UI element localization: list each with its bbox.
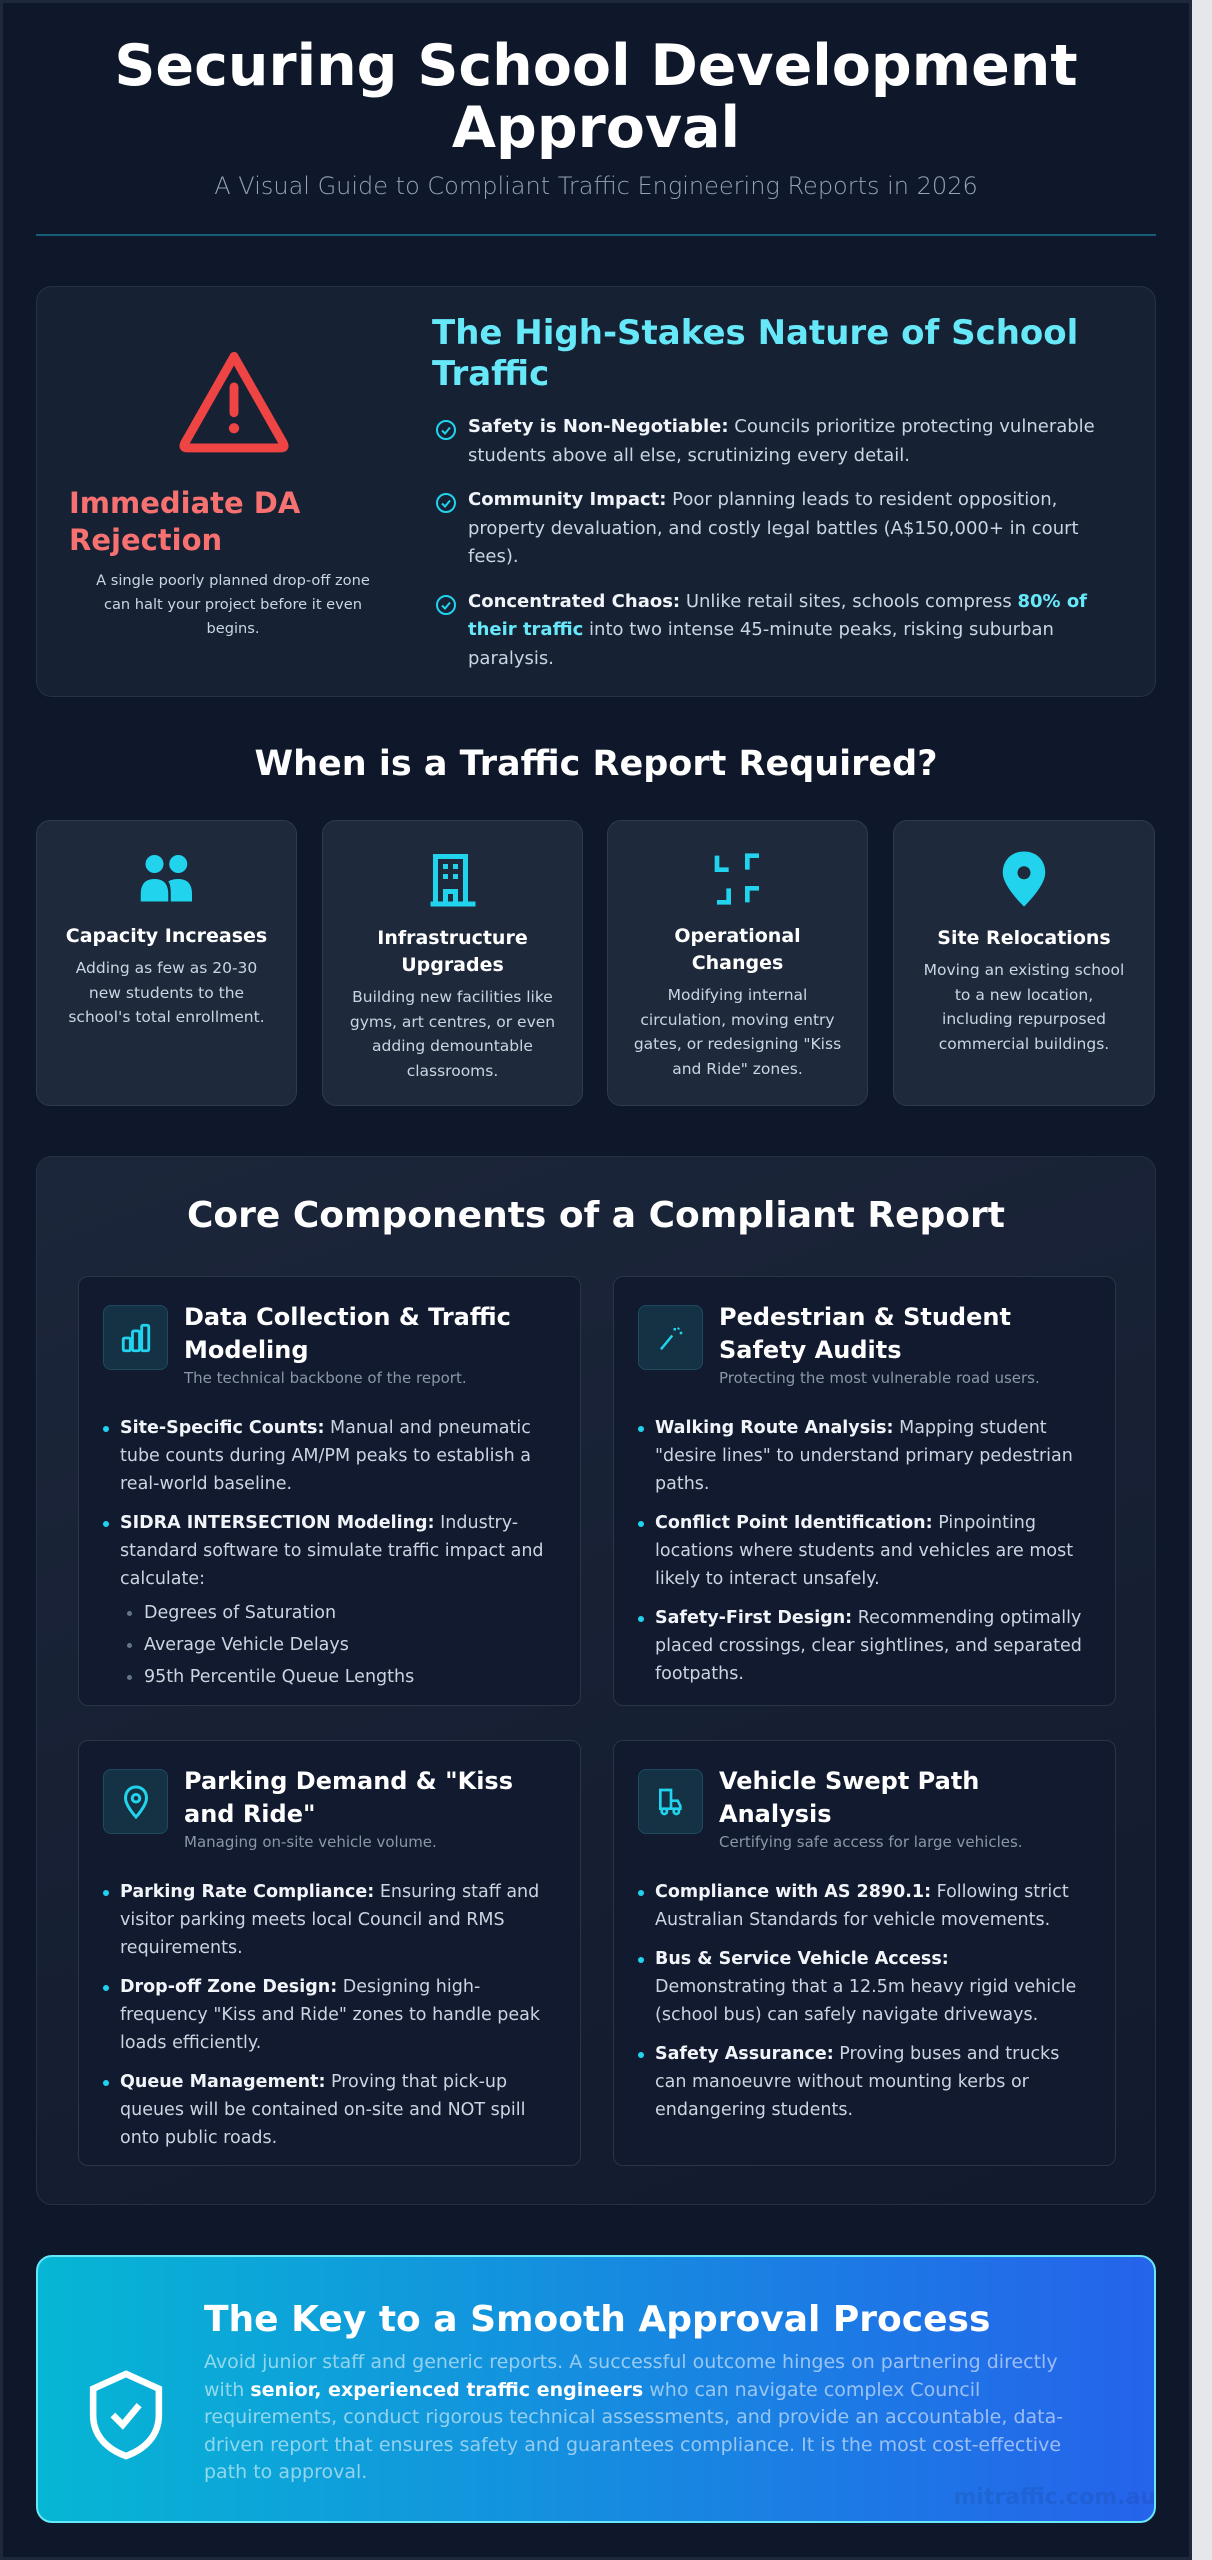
panel: key to approval	[36, 2255, 1156, 2523]
heading: core components: Core Components of a Compliant Report	[187, 1195, 1005, 1236]
bullets: high stakes	[436, 416, 1095, 668]
card: parking demand: Managing on-site vehicle volume.	[184, 1833, 437, 1851]
card: site relocations	[893, 820, 1155, 1106]
icon: location pin	[103, 1769, 168, 1834]
card: parking demand: Parking Rate Compliance: Ensuring staff and visitor parking meets local Council and RMS requirements.	[120, 1882, 539, 1958]
icon: wand	[638, 1305, 703, 1370]
card: data collection	[78, 1276, 581, 1706]
text: rejection description: A single poorly planned drop-off zone can halt your project before it even begins.	[96, 572, 370, 637]
card: parking demand: Queue Management: Proving that pick-up queues will be contained on-site and NOT spill onto public roads.	[120, 2072, 526, 2148]
text: key description: Avoid junior staff and generic reports. A successful outcome hinges on partnering directly with senior, experienced traffic engineers who can navigate complex Council requirements, conduct rigorous technical assessments, and provide an accountable, data-driven report that ensures safety and guarantees compliance. It is the most cost-effective path to approval.	[204, 2351, 1063, 2483]
card: swept path: Demonstrating that a 12.5m heavy rigid vehicle (school bus) can safely navigate driveways.	[655, 1977, 1076, 2025]
card: data collection: Degrees of Saturation	[144, 1603, 336, 1623]
card: pedestrian safety: Safety-First Design: Recommending optimally placed crossings, clear sightlines, and separated footpaths.	[655, 1608, 1082, 1684]
card: operational changes: Operational Changes	[674, 925, 801, 974]
icon: map pin	[1002, 852, 1046, 906]
card: swept path: Vehicle Swept Path Analysis	[719, 1767, 979, 1828]
panel: core components	[36, 1156, 1156, 2205]
panel: high stakes	[36, 286, 1156, 697]
heading: immediate DA rejection	[69, 486, 300, 557]
card: pedestrian safety: Pedestrian & Student Safety Audits	[719, 1303, 1011, 1364]
card: data collection: 95th Percentile Queue Lengths	[144, 1667, 414, 1687]
title	[114, 33, 1078, 161]
card: data collection: SIDRA INTERSECTION Modeling: Industry-standard software to simulate traffic impact and calculate:	[120, 1513, 544, 1589]
heading: key to approval: The Key to a Smooth Approval Process	[204, 2299, 990, 2340]
title: Approval	[452, 95, 740, 161]
watermark: mitraffic.com.au	[953, 2485, 1156, 2510]
card: swept path	[613, 1740, 1116, 2166]
card: pedestrian safety	[613, 1276, 1116, 1706]
icon: shrink arrows	[714, 853, 759, 905]
icon: building	[430, 854, 476, 906]
card: capacity increases	[36, 820, 297, 1106]
card: site relocations: Moving an existing school to a new location, including repurposed commercial buildings.	[924, 961, 1124, 1052]
card: operational changes: Modifying internal circulation, moving entry gates, or redesigning "Kiss and Ride" zones.	[634, 986, 841, 1078]
card: data collection: Data Collection & Traffic Modeling	[184, 1303, 511, 1364]
card: capacity increases: Capacity Increases	[66, 925, 267, 947]
icon: truck	[638, 1769, 703, 1834]
card: swept path: Bus & Service Vehicle Access:	[655, 1949, 949, 1969]
subtitle: A Visual Guide to Compliant Traffic Engineering Reports in 2026	[214, 172, 978, 200]
heading: when is report required: When is a Traffic Report Required?	[254, 744, 938, 784]
card: infrastructure upgrades	[322, 820, 583, 1106]
card: swept path: Compliance with AS 2890.1: Following strict Australian Standards for vehicle movements.	[655, 1882, 1069, 1930]
card: parking demand: Drop-off Zone Design: Designing high-frequency "Kiss and Ride" zones to handle peak loads efficiently.	[120, 1977, 540, 2053]
icon: people	[140, 855, 192, 902]
card: swept path: Certifying safe access for large vehicles.	[719, 1833, 1023, 1851]
card: pedestrian safety: Protecting the most vulnerable road users.	[719, 1369, 1040, 1387]
icon: shield check	[90, 2370, 162, 2460]
card: data collection: Site-Specific Counts: Manual and pneumatic tube counts during AM/PM peaks to establish a real-world baseline.	[120, 1418, 531, 1494]
heading: high stakes: The High-Stakes Nature of School Traffic	[432, 313, 1078, 394]
card: swept path: Safety Assurance: Proving buses and trucks can manoeuvre without mounting kerbs or endangering students.	[655, 2044, 1059, 2120]
icon: warning triangle	[179, 352, 289, 452]
card: pedestrian safety: Walking Route Analysis: Mapping student "desire lines" to understand primary pedestrian paths.	[655, 1418, 1073, 1494]
card: site relocations: Site Relocations	[937, 927, 1111, 949]
card: data collection: Average Vehicle Delays	[144, 1635, 349, 1655]
heading: immediate DA rejection: Immediate DA	[69, 486, 300, 520]
card: parking demand	[78, 1740, 581, 2166]
card: operational changes	[607, 820, 868, 1106]
bullets: high stakes: Community Impact: Poor planning leads to resident opposition, property devaluation, and costly legal battles (A$150,000+ in court fees).	[468, 489, 1079, 567]
card: pedestrian safety: Conflict Point Identification: Pinpointing locations where students and vehicles are most likely to interact unsafely.	[655, 1513, 1073, 1589]
title: Securing School Development	[114, 33, 1078, 99]
bullets: high stakes: Concentrated Chaos: Unlike retail sites, schools compress 80% of their traffic into two intense 45-minute peaks, risking suburban paralysis.	[468, 590, 1087, 668]
card: infrastructure upgrades: Building new facilities like gyms, art centres, or even adding demountable classrooms.	[350, 988, 555, 1080]
card: infrastructure upgrades: Infrastructure Upgrades	[377, 927, 528, 976]
card: capacity increases: Adding as few as 20-30 new students to the school's total enrollment.	[68, 959, 265, 1026]
card: parking demand: Parking Demand & "Kiss and Ride"	[184, 1767, 513, 1828]
bullets: high stakes: Safety is Non-Negotiable: Councils prioritize protecting vulnerable students above all else, scrutinizing every detail.	[468, 416, 1095, 466]
icon: bar chart	[103, 1305, 168, 1370]
heading: immediate DA rejection: Rejection	[69, 523, 222, 557]
card: data collection: The technical backbone of the report.	[184, 1369, 467, 1387]
